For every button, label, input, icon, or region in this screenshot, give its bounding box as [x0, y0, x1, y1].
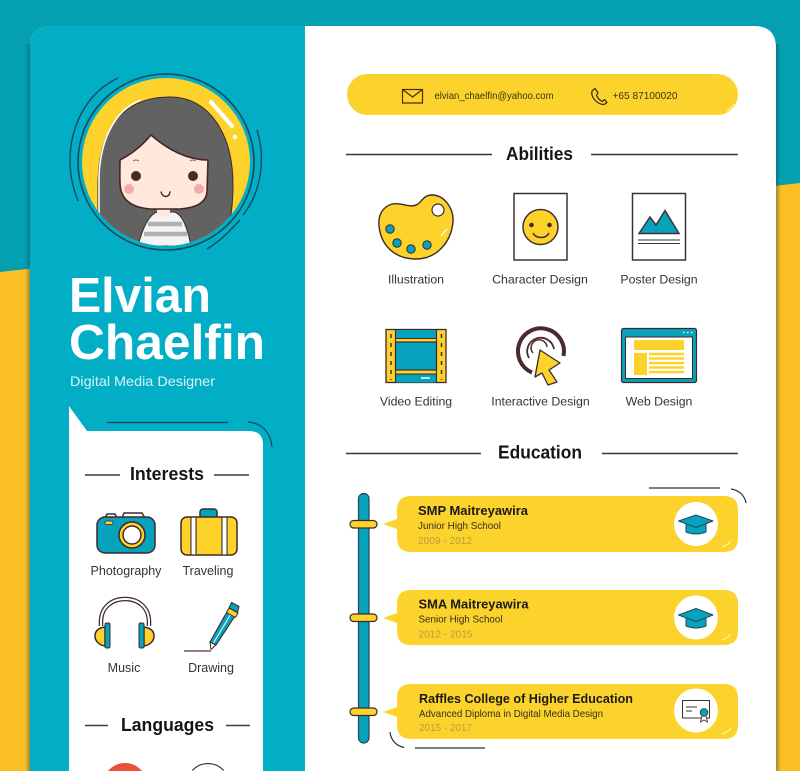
- icon: pencil and line: [184, 602, 239, 651]
- label: Photography: [91, 564, 162, 578]
- dates: 2009 - 2012: [418, 536, 472, 547]
- card: SMA Maitreyawira: [383, 590, 738, 645]
- icon: certificate: [674, 688, 718, 732]
- icon: envelope: [402, 90, 422, 103]
- sweater: [138, 212, 191, 246]
- face: [120, 135, 208, 209]
- label: Music: [108, 661, 140, 675]
- dates: 2012 - 2015: [418, 630, 473, 640]
- icon: video editing film: [386, 330, 446, 382]
- panel: interests and languages: [69, 406, 272, 771]
- icon: phone: [592, 88, 607, 104]
- heading: abilities: Abilities: [506, 144, 573, 164]
- label: Interactive Design: [491, 394, 590, 408]
- label: Illustration: [388, 272, 444, 286]
- heading: languages: Languages: [121, 715, 214, 735]
- hair: [98, 97, 233, 250]
- icon: web design: [622, 328, 696, 382]
- label: Drawing: [188, 661, 234, 675]
- label: Character Design: [492, 272, 588, 286]
- icon: headphones: [95, 599, 154, 648]
- job title: Digital Media Designer: [70, 373, 215, 389]
- icon: palette: [379, 195, 453, 259]
- icon: character design: [514, 194, 567, 260]
- icon: suitcase: [181, 509, 237, 555]
- name: Chaelfin: [69, 316, 265, 370]
- avatar portrait: [70, 74, 261, 250]
- name: [69, 269, 265, 370]
- icon: camera: [97, 513, 155, 553]
- icon: graduation cap: [674, 596, 718, 640]
- label: Traveling: [183, 564, 234, 578]
- icon: poster design: [632, 194, 686, 260]
- label: Web Design: [626, 394, 693, 408]
- subtitle: Senior High School: [418, 614, 502, 626]
- icon: interactive design: [518, 328, 564, 385]
- icon: red flag circle: [108, 763, 142, 771]
- contact bar: [347, 74, 738, 115]
- title: Raffles College of Higher Education: [419, 691, 633, 706]
- label: Video Editing: [380, 394, 452, 408]
- subtitle: Advanced Diploma in Digital Media Design: [419, 709, 603, 720]
- heading: interests: Interests: [130, 464, 204, 484]
- timeline bar: [350, 494, 377, 743]
- phone number: +65 87100020: [612, 90, 678, 102]
- card: Raffles College: [383, 684, 738, 739]
- heading: education: Education: [498, 442, 582, 462]
- subtitle: Junior High School: [418, 521, 501, 532]
- icon: white flag circle: [192, 764, 224, 770]
- label: Poster Design: [620, 272, 698, 286]
- card: SMP Maitreyawira: [383, 496, 738, 552]
- dates: 2015 - 2017: [419, 723, 472, 734]
- name: Elvian: [69, 269, 211, 323]
- decorative corner lines: [390, 488, 746, 748]
- icon: graduation cap: [674, 502, 718, 546]
- email: elvian_chaelfin@yahoo.com: [434, 90, 554, 102]
- title: SMA Maitreyawira: [418, 596, 529, 612]
- title: SMP Maitreyawira: [418, 503, 529, 518]
